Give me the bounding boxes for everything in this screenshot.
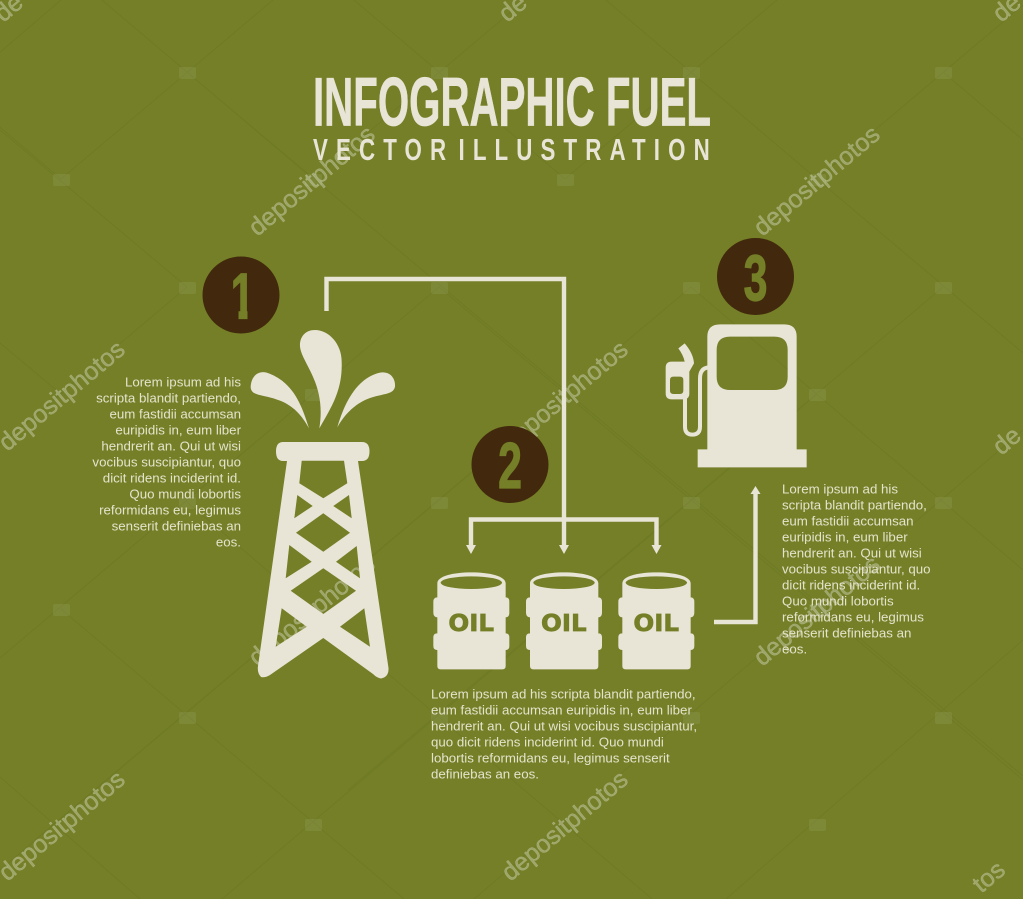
barrel 3: OIL [633,611,679,637]
text block: step 3: vocibus suscipiantur, quo [782,562,931,576]
text block: step 3: dicit ridens inciderint id. [782,578,920,592]
arrow: barrels to pump [714,486,760,622]
badge 2 [472,426,548,503]
badge 3 [717,238,794,315]
icon: oil derrick [258,442,389,678]
barrel 3 [618,572,694,669]
text block: step 2: eum fastidii accumsan euripidis in, eum liber [431,702,692,718]
arrowheads: down to barrels [466,545,662,554]
watermark text: depositphotos [243,550,380,672]
text block: step 3: euripidis in, eum liber [782,530,908,544]
text block: step 1: eos. [216,534,241,550]
text block: step 3: reformidans eu, legimus [782,610,924,624]
text block: step 3 [782,482,931,656]
text block: step 2: definiebas an eos. [431,766,539,782]
text block: step 1: Lorem ipsum ad his [125,374,241,390]
text block: step 1: hendrerit an. Qui ut wisi [101,438,241,454]
text block: step 3: Quo mundi lobortis [782,594,894,608]
barrel 2 [526,572,602,669]
text block: step 1: euripidis in, eum liber [115,422,242,438]
text block: step 3: scripta blandit partiendo, [782,498,927,512]
watermark text: depositphotos [243,120,380,242]
text block: step 3: eum fastidii accumsan [782,514,914,528]
text block: step 1: Quo mundi lobortis [129,486,241,502]
watermark camera icons [53,67,952,831]
arrow: rig to barrels [326,279,656,547]
barrel 1: OIL [448,611,494,637]
barrel 1 [433,572,509,669]
text block: step 2: Lorem ipsum ad his scripta blandit partiendo, [431,686,696,702]
watermark text: depositphotos [496,335,633,457]
text block: step 3: Lorem ipsum ad his [782,482,898,496]
text block: step 1: eum fastidii accumsan [109,406,241,422]
badge 1: 1 [231,259,254,333]
text block: step 2: lobortis reformidans eu, legimus senserit [431,750,670,766]
text block: step 1: scripta blandit partiendo, [96,390,241,406]
text block: step 2: quo dicit ridens inciderint id. Quo mundi [431,734,664,750]
subtitle: VECTOR ILLUSTRATION [313,132,710,167]
text block: step 1: dicit ridens inciderint id. [103,470,241,486]
icon: oil barrels [433,572,694,669]
watermark text: depositphotos [748,120,885,242]
text block: step 1 [92,374,242,550]
text block: step 2: hendrerit an. Qui ut wisi vocibus suscipiantur, [431,718,697,734]
badge 2: 2 [498,429,522,502]
text block: step 1: senserit definiebas an [112,518,241,534]
badge 1 [202,256,280,334]
barrel 2: OIL [541,611,587,637]
watermark text: tos [967,855,1011,898]
text block: step 1: vocibus suscipiantur, quo [92,454,241,470]
text block: step 1: reformidans eu, legimus [99,502,241,518]
text block: step 2 [431,686,697,782]
title: INFOGRAPHIC FUEL [313,64,711,140]
text block: step 3: senserit definiebas an [782,626,911,640]
text block: step 3: hendrerit an. Qui ut wisi [782,546,922,560]
badge 3: 3 [744,241,767,315]
watermark text: depositphotos [496,765,633,887]
icon: oil gush [251,330,395,428]
icon: fuel pump [666,324,807,467]
watermark text: depositphotos [748,550,885,672]
text block: step 3: eos. [782,642,807,656]
